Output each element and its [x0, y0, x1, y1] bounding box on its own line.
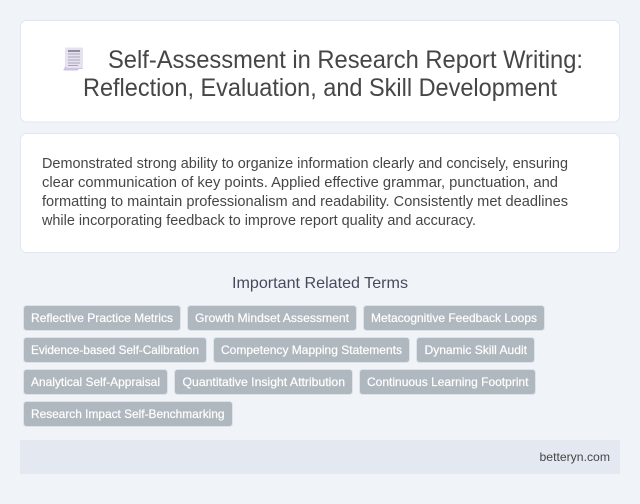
tag: Continuous Learning Footprint — [367, 375, 529, 389]
icon: scroll document — [64, 48, 83, 70]
summary paragraph: clear communication of key points. Applied effective grammar, punctuation, and — [42, 175, 558, 191]
summary paragraph — [41, 156, 568, 229]
tag: Analytical Self-Appraisal — [31, 375, 160, 389]
title text — [83, 46, 583, 102]
footer bar — [20, 440, 620, 474]
tag — [24, 338, 206, 362]
tag: Growth Mindset Assessment — [195, 311, 350, 325]
tag list — [24, 306, 544, 426]
panel: summary card — [20, 134, 620, 252]
tag — [24, 370, 168, 394]
tag — [214, 338, 410, 362]
summary paragraph: while incorporating feedback to improve report quality and accuracy. — [41, 213, 476, 229]
tag: Competency Mapping Statements — [221, 343, 402, 357]
tag: Quantitative Insight Attribution — [182, 375, 345, 389]
tag: Dynamic Skill Audit — [424, 343, 528, 357]
tag: Reflective Practice Metrics — [31, 311, 173, 325]
tag — [360, 370, 536, 394]
tag — [24, 402, 232, 426]
tag — [174, 370, 352, 394]
title text: Reflection, Evaluation, and Skill Development — [83, 74, 557, 102]
tag: Research Impact Self-Benchmarking — [31, 407, 224, 421]
summary paragraph: formatting to maintain professionalism and readability. Consistently met deadlines — [42, 194, 568, 210]
tag — [364, 306, 544, 330]
tag — [24, 306, 180, 330]
footer site name: betteryn.com — [540, 450, 610, 464]
summary paragraph: Demonstrated strong ability to organize information clearly and concisely, ensuring — [42, 156, 568, 172]
tag — [416, 338, 534, 362]
panel: title card — [20, 20, 620, 122]
tag: Evidence-based Self-Calibration — [31, 343, 199, 357]
title text: Self-Assessment in Research Report Writing: — [108, 46, 583, 74]
tag — [188, 306, 356, 330]
tag: Metacognitive Feedback Loops — [371, 311, 537, 325]
heading: important related terms: Important Related Terms — [232, 275, 408, 292]
